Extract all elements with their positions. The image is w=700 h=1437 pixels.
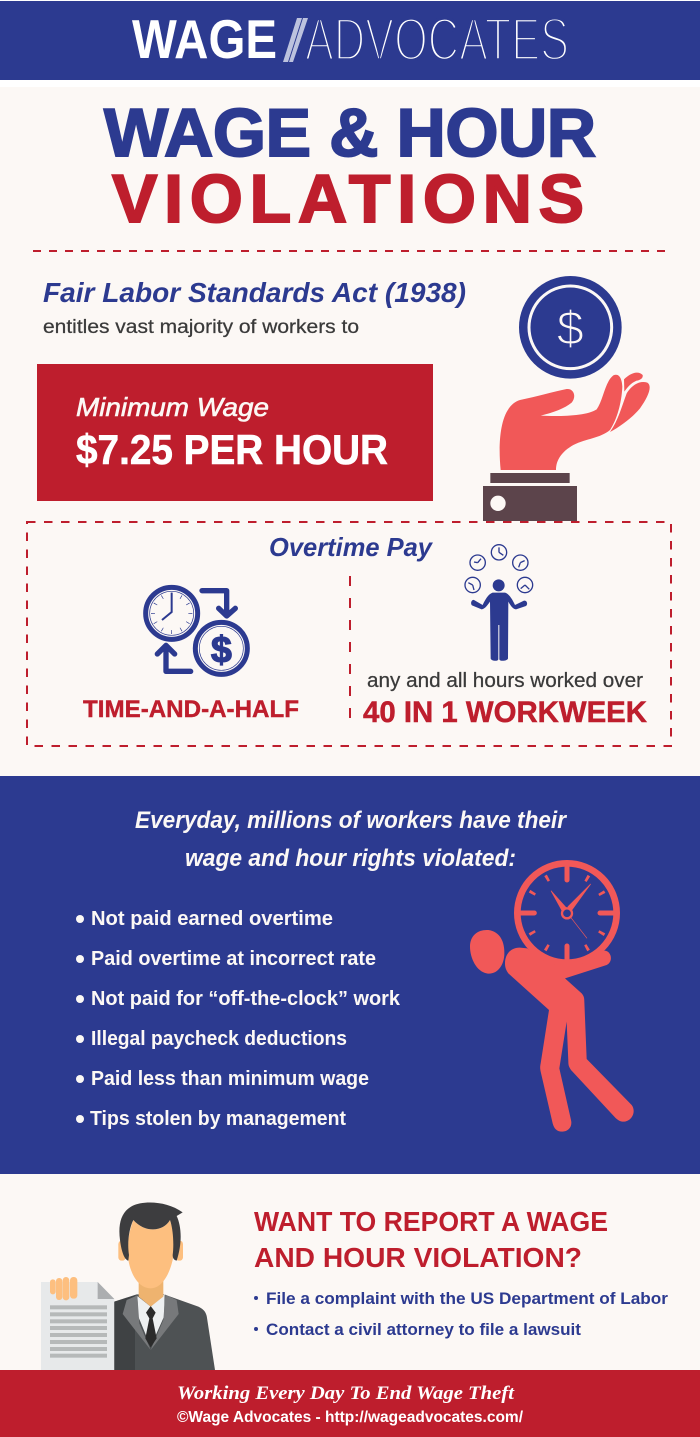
- violations list: Illegal paycheck deductions: [91, 1028, 347, 1050]
- panel: rights violated: [0, 776, 700, 1174]
- report a violation call to action: [254, 1206, 668, 1339]
- hours worked text: any and all hours worked over: [367, 670, 643, 692]
- report a violation call to action: WANT TO REPORT A WAGE: [254, 1206, 608, 1237]
- panel: overtime pay: [27, 522, 671, 746]
- icon: clock and dollar exchange: $: [211, 628, 232, 670]
- panel: minimum wage: Minimum Wage: [76, 392, 269, 422]
- violations list: Not paid earned overtime: [91, 908, 333, 930]
- 40 in 1 workweek: 40 IN 1 WORKWEEK: [363, 696, 647, 729]
- violations heading: wage and hour rights violated:: [185, 845, 516, 872]
- icon: clock and dollar exchange: [146, 587, 247, 674]
- violations list: [76, 908, 401, 1130]
- panel: minimum wage: [37, 364, 433, 501]
- icon: hand holding coin: $: [557, 302, 584, 356]
- illustration: attorney holding document: [41, 1202, 215, 1370]
- upper cream panel: [0, 87, 700, 776]
- violations list: Not paid for “off-the-clock” work: [91, 988, 401, 1010]
- icon: hand holding coin: [483, 276, 650, 521]
- panel: minimum wage: $7.25 PER HOUR: [76, 426, 388, 473]
- time-and-a-half label: TIME-AND-A-HALF: [83, 696, 299, 723]
- header banner: [0, 1, 700, 80]
- overtime heading: Overtime Pay: [269, 532, 433, 562]
- logo: Wage Advocates: WAGE: [132, 8, 277, 70]
- title: VIOLATIONS: [112, 161, 584, 237]
- report a violation call to action: AND HOUR VIOLATION?: [254, 1242, 582, 1273]
- Fair Labor Standards Act intro: Fair Labor Standards Act (1938): [43, 277, 466, 308]
- icon: worker carrying clock: [470, 863, 634, 1132]
- violations list: Paid overtime at incorrect rate: [91, 948, 376, 970]
- violations heading: Everyday, millions of workers have their: [135, 807, 568, 834]
- logo: Wage Advocates: ADVOCATES: [305, 6, 569, 73]
- footer: [0, 1370, 700, 1437]
- violations list: Paid less than minimum wage: [91, 1068, 369, 1090]
- footer: ©Wage Advocates - http://wageadvocates.com/: [177, 1409, 524, 1426]
- violations list: Tips stolen by management: [90, 1108, 346, 1130]
- footer: Working Every Day To End Wage Theft: [177, 1383, 515, 1404]
- logo: Wage Advocates: [132, 6, 569, 73]
- Fair Labor Standards Act intro: [43, 277, 466, 338]
- report a violation call to action: File a complaint with the US Department of Labor: [266, 1289, 668, 1308]
- title: [104, 95, 596, 237]
- report a violation call to action: Contact a civil attorney to file a lawsuit: [266, 1320, 581, 1339]
- lower cream panel: [0, 1174, 700, 1370]
- Fair Labor Standards Act intro: entitles vast majority of workers to: [43, 317, 359, 338]
- violations heading: [135, 807, 568, 872]
- icon: man juggling clocks: [465, 545, 533, 661]
- title: WAGE & HOUR: [104, 95, 596, 171]
